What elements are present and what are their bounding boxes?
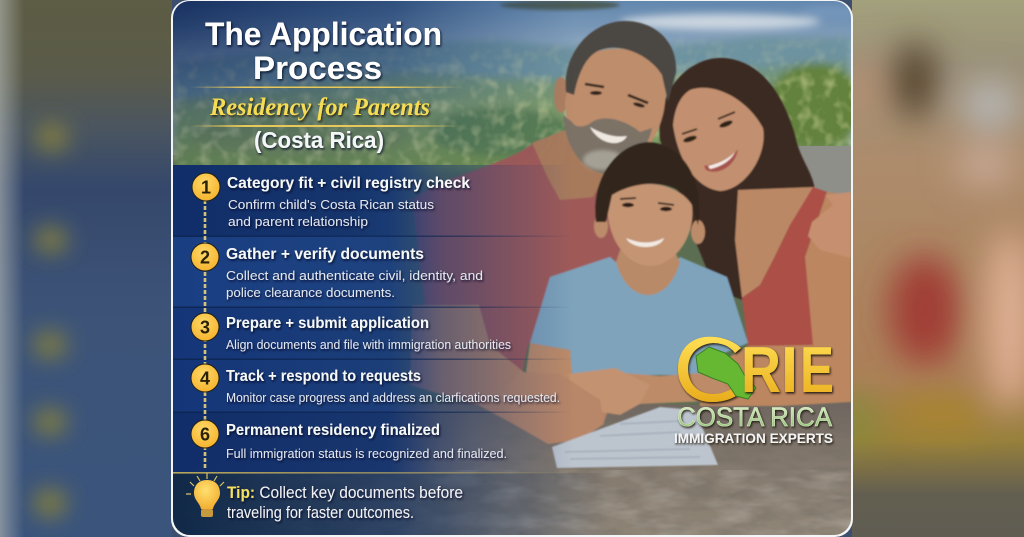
step 1 number badge: 1 [201,178,211,198]
logo: RIE letters: E [800,333,834,406]
blurred background: right side [842,0,1024,537]
step 6 [191,420,507,461]
step 2 text: police clearance documents. [226,286,395,300]
photo: bench [795,146,851,200]
blurred background: left side [0,0,172,537]
step 6 number badge [191,420,219,448]
step 4 text: Monitor case progress and address an clarfications requested. [226,391,560,405]
step 1 text: and parent relationship [228,215,368,229]
step 1 text: Category fit + civil registry check [227,175,470,192]
tip text: traveling for faster outcomes. [227,504,414,522]
photo: hands [520,367,640,444]
step 1 number badge [192,173,220,201]
logo: RIE letters: I [781,333,798,406]
step 2 number badge [191,243,219,271]
photo: table [173,400,851,535]
title: Process [253,50,382,86]
title [205,16,442,86]
logo: tagline: IMMIGRATION EXPERTS [674,430,833,446]
step 3 number badge: 3 [200,318,210,338]
step 2 number badge: 2 [200,248,210,268]
step 6 text [226,422,507,461]
photo: application paper [552,407,718,468]
step 3 text [226,315,511,352]
step 2 text: Collect and authenticate civil, identity, and [226,269,483,283]
photo: family group [410,21,851,468]
icon: light bulb [186,473,224,517]
photo: sky and mountains [173,0,863,425]
logo: Costa Rica map [696,347,756,399]
step 1 text [227,175,470,229]
step 2 [191,243,483,300]
divider: upper gold rule [190,86,460,88]
panel: header overlay [173,0,573,166]
photo: woman [660,58,851,406]
step 3 text: Prepare + submit application [226,315,429,332]
step 6 number badge: 6 [200,424,210,444]
photo: boy [526,142,748,404]
title: The Application [205,16,442,52]
panel: tip overlay [173,473,613,535]
step 6 text: Full immigration status is recognized and finalized. [226,447,507,461]
step 4 [191,364,560,405]
step 3 number badge [191,313,219,341]
step 4 text [226,368,560,405]
step 2 text [226,246,483,300]
panel: photo card [171,0,863,537]
step 3 [191,313,511,352]
subtitle: residency for parents: Residency for Parents [209,94,430,121]
step 1 [192,173,470,229]
step 6 text: Permanent residency finalized [226,422,440,439]
logo: Costa Rica wordmark: COSTA RICA [677,402,832,432]
panel: steps overlay [173,165,573,473]
step 4 text: Track + respond to requests [226,368,421,385]
step 4 number badge: 4 [200,368,210,388]
logo: letter C [678,337,741,402]
step 4 number badge [191,364,219,392]
tip text: Tip: Collect key documents before [227,484,463,502]
step 1 text: Confirm child's Costa Rican status [228,198,434,212]
tip text [227,484,463,522]
step 3 text: Align documents and file with immigration authorities [226,338,511,352]
logo: RIE letters: R [741,333,781,406]
divider: lower gold rule [190,125,460,127]
connector: dashed timeline [204,200,206,468]
logo: RIE letters [741,333,834,406]
logo: CRIE Costa Rica Immigration Experts [674,333,834,446]
photo: man [410,21,676,443]
step 2 text: Gather + verify documents [226,246,424,263]
subtitle: costa rica: (Costa Rica) [254,127,384,153]
